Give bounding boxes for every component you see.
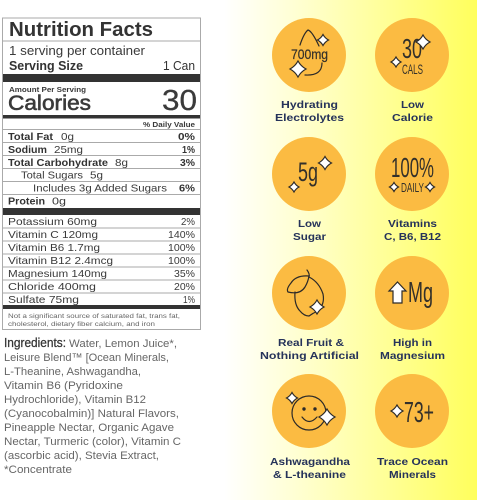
label: high in magnesium (380, 337, 445, 362)
text block: ingredients: Hydrochloride), Vitamin B12 (4, 394, 146, 406)
icon: 100% daily (375, 137, 449, 211)
text block: ingredients: Ingredients: (4, 336, 66, 350)
macronutrient rows: 25mg (54, 144, 83, 156)
label: high in magnesium: Magnesium (380, 350, 445, 362)
calories (8, 85, 197, 117)
text block: ingredients: Pineapple Nectar, Organic Agave (4, 422, 174, 434)
icon: low calorie: CALS (402, 61, 423, 77)
micronutrient rows: 2% (181, 216, 195, 228)
label: vitamins: C, B6, B12 (384, 231, 441, 243)
text block: ingredients: L-Theanine, Ashwagandha, (4, 366, 141, 378)
icon: low sugar (272, 137, 346, 211)
label: low sugar (293, 218, 326, 243)
text block: ingredients: (Cyanocobalmin)] Natural Flavors, (4, 408, 179, 420)
micronutrient rows: Vitamin B12 2.4mcg (8, 255, 113, 267)
micronutrient rows: Sulfate 75mg (8, 294, 79, 306)
icon: 73+ minerals: 73+ (404, 397, 434, 429)
macronutrient rows: Includes 3g Added Sugars (33, 182, 167, 194)
micronutrient rows: 100% (168, 242, 195, 254)
footnote: cholesterol, dietary fiber calcium, and iron (8, 321, 155, 328)
label: real fruit: Real Fruit & (278, 337, 344, 349)
micronutrient rows (8, 216, 195, 306)
icon: hydrating electrolytes: 700mg (291, 47, 328, 62)
label: ashwagandha: & L-theanine (273, 469, 346, 481)
macronutrient rows (8, 131, 196, 208)
text block: ingredients: (ascorbic acid), Stevia Extract, (4, 450, 159, 462)
macronutrient rows: 8g (115, 157, 128, 169)
icon: low calorie: 30 (402, 33, 422, 64)
icon: smiley (272, 374, 346, 448)
footnote: Not a significant source of saturated fat, trans fat, (8, 313, 180, 320)
label: real fruit (260, 337, 359, 362)
servings (9, 44, 195, 73)
servings: Serving Size (9, 59, 83, 73)
micronutrient rows: 1% (183, 294, 195, 306)
label: high in magnesium: High in (393, 337, 432, 349)
macronutrient rows: 0g (61, 131, 74, 143)
label: low calorie: Calorie (392, 112, 433, 124)
label: low calorie (392, 99, 433, 124)
servings: 1 serving per container (9, 44, 145, 58)
macronutrient rows: 0% (178, 131, 196, 143)
label: trace ocean minerals (377, 456, 448, 481)
label: low sugar: Sugar (293, 231, 326, 243)
macronutrient rows: 6% (179, 182, 196, 194)
footnote (8, 313, 180, 328)
label: low sugar: Low (298, 218, 322, 230)
label: real fruit: Nothing Artificial (260, 350, 359, 362)
calories: Amount Per Serving (9, 87, 86, 94)
micronutrient rows: Magnesium 140mg (8, 268, 107, 280)
label: hydrating electrolytes: Hydrating (281, 99, 338, 111)
icon: hydrating electrolytes (272, 18, 346, 92)
micronutrient rows: Potassium 60mg (8, 216, 97, 228)
icon: lemon (272, 256, 346, 330)
macronutrient rows: Sodium (8, 144, 47, 156)
label: hydrating electrolytes (275, 99, 344, 124)
label: trace ocean minerals: Minerals (389, 469, 436, 481)
label: trace ocean minerals: Trace Ocean (377, 456, 448, 468)
label: ashwagandha: Ashwagandha (270, 456, 350, 468)
label: low calorie: Low (401, 99, 425, 111)
micronutrient rows: 20% (174, 281, 195, 293)
daily value header: % Daily Value (143, 120, 195, 129)
panel: nutrition facts (2, 18, 200, 330)
icon: 100% daily: DAILY (401, 180, 424, 195)
text block: ingredients: Water, Lemon Juice*, (69, 338, 177, 350)
micronutrient rows: 35% (174, 268, 195, 280)
micronutrient rows: 140% (168, 229, 195, 241)
micronutrient rows: Vitamin B6 1.7mg (8, 242, 100, 254)
macronutrient rows: Total Carbohydrate (8, 157, 108, 169)
label: vitamins (384, 218, 441, 243)
macronutrient rows: Total Sugars (21, 170, 83, 182)
calories: 30 (162, 85, 197, 117)
micronutrient rows: 100% (168, 255, 195, 267)
label: hydrating electrolytes: Electrolytes (275, 112, 344, 124)
label: ashwagandha (270, 456, 350, 481)
icon: magnesium arrow: Mg (408, 277, 433, 309)
macronutrient rows: 5g (90, 170, 103, 182)
text block: ingredients: Vitamin B6 (Pyridoxine (4, 380, 123, 392)
macronutrient rows: 1% (182, 144, 196, 156)
label: vitamins: Vitamins (388, 218, 437, 230)
icon: magnesium arrow (375, 256, 449, 330)
icon: 100% daily: 100% (391, 152, 434, 183)
text block: ingredients: Nectar, Turmeric (color), Vitamin C (4, 436, 181, 448)
icon: low calorie (375, 18, 449, 92)
icon: 73+ minerals (375, 374, 449, 448)
servings: 1 Can (163, 59, 195, 73)
micronutrient rows: Chloride 400mg (8, 281, 96, 293)
text block: ingredients: *Concentrate (4, 464, 72, 476)
macronutrient rows: 3% (180, 157, 196, 169)
text block: ingredients: Leisure Blend™ [Ocean Minerals, (4, 352, 169, 364)
macronutrient rows: Total Fat (8, 131, 54, 143)
text block: ingredients (4, 336, 181, 476)
macronutrient rows: Protein (8, 196, 45, 208)
macronutrient rows: 0g (52, 196, 66, 208)
icon: low sugar: 5g (298, 157, 318, 187)
heading: nutrition facts: Nutrition Facts (9, 19, 153, 41)
calories: Calories (8, 92, 91, 115)
micronutrient rows: Vitamin C 120mg (8, 229, 98, 241)
